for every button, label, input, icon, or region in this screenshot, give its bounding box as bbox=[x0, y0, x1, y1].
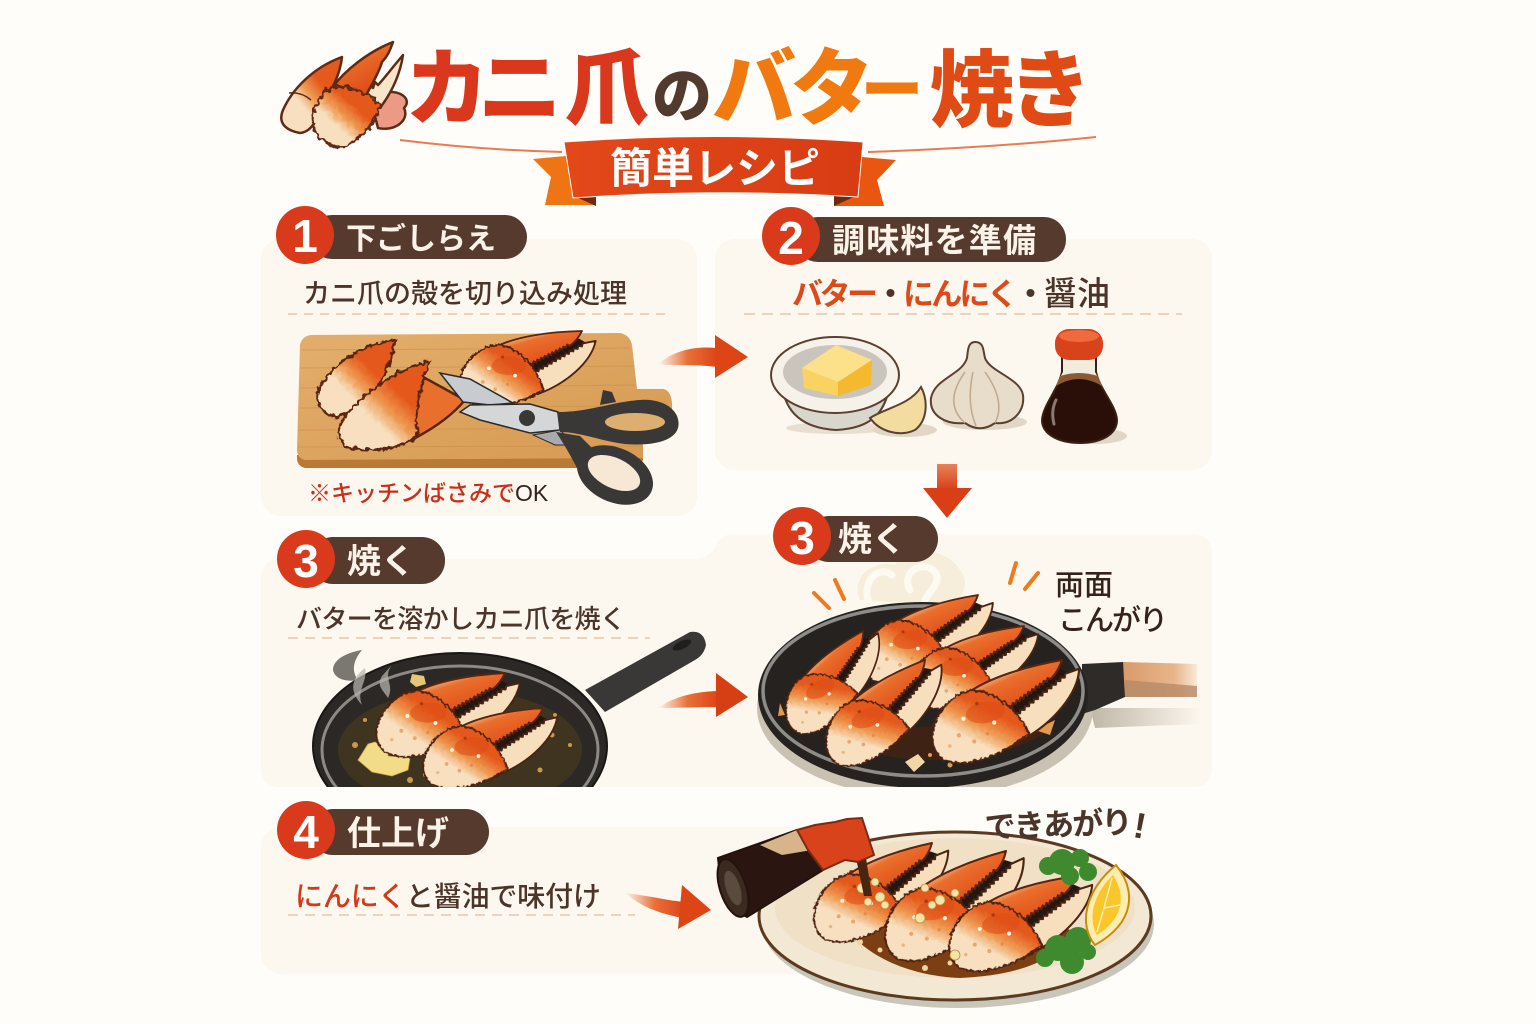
title text: カ bbox=[405, 42, 489, 136]
panel background bbox=[261, 827, 821, 974]
title text: 焼 bbox=[930, 44, 1014, 138]
ingredients text: ・ bbox=[875, 277, 906, 312]
title text: ー bbox=[861, 57, 923, 126]
step badge 4: 仕上げ bbox=[347, 815, 449, 853]
panel: step 3 both sides browned bbox=[757, 507, 1200, 798]
icon: soy sauce pouring bbox=[711, 818, 874, 921]
panel background bbox=[261, 239, 697, 516]
arrow: step 3 left to right bbox=[658, 673, 748, 717]
step badge 3: 焼く bbox=[838, 521, 906, 559]
panel: step 4 finishing bbox=[261, 801, 1154, 1008]
ingredients text: にんにく bbox=[903, 277, 1018, 312]
lemon bbox=[1086, 865, 1129, 945]
ingredients text: 醤油 bbox=[1044, 275, 1110, 312]
icon: garlic clove bbox=[870, 387, 937, 437]
icon: butter in dish bbox=[771, 337, 899, 434]
step badge 2: 調味料を準備 bbox=[832, 222, 1036, 259]
caption: finished: できあがり bbox=[984, 805, 1133, 845]
arrow: to finished plate bbox=[625, 885, 711, 929]
icon: kitchen scissors bbox=[440, 373, 679, 516]
exclamation mark: ! bbox=[1130, 804, 1149, 847]
icon: garlic bulb bbox=[931, 342, 1027, 430]
instruction text: カニ爪の殻を切り込み処理 bbox=[303, 279, 627, 309]
step badge 3 bbox=[773, 507, 938, 565]
title text bbox=[405, 42, 1092, 138]
note text bbox=[1055, 570, 1168, 637]
arrow: step 1 to step 2 bbox=[658, 335, 748, 378]
note text: 両面 bbox=[1055, 570, 1113, 602]
illustration: pan with browned claws bbox=[757, 593, 1200, 798]
illustration: finished plate bbox=[759, 832, 1154, 1008]
ingredients text bbox=[792, 275, 1110, 312]
step badge 4 bbox=[277, 801, 489, 859]
icon: steam bbox=[333, 650, 392, 705]
title text: ニ bbox=[478, 42, 562, 136]
step badge 2: 2 bbox=[778, 212, 804, 264]
note text: こんがり bbox=[1058, 604, 1168, 637]
step badge 2 bbox=[762, 207, 1066, 265]
title text: 爪 bbox=[565, 42, 649, 136]
garlic bits bbox=[857, 878, 960, 960]
title text: き bbox=[1008, 44, 1092, 138]
panel background: step 3 merged bbox=[261, 534, 1212, 787]
header: title and ribbon bbox=[281, 42, 1096, 206]
icon: crab claws bbox=[281, 42, 407, 148]
step badge 1: 1 bbox=[292, 210, 318, 262]
step badge 3: 焼く bbox=[347, 543, 415, 581]
parsley bbox=[1036, 849, 1097, 974]
instruction text: バターを溶かしカニ爪を焼く bbox=[296, 604, 626, 634]
panel background bbox=[715, 239, 1212, 470]
step badge 1 bbox=[276, 206, 527, 264]
step badge 4: 4 bbox=[293, 806, 319, 858]
icon: soy sauce bottle bbox=[1042, 329, 1127, 444]
steam cloud bbox=[858, 552, 965, 605]
title text: バ bbox=[712, 42, 796, 136]
title text: タ bbox=[790, 42, 874, 136]
note text: ※キッチンばさみでOK bbox=[308, 480, 549, 506]
step badge 3: 3 bbox=[789, 512, 815, 564]
step badge 3 bbox=[277, 530, 445, 588]
illustration: cutting board with claws bbox=[297, 331, 672, 468]
sizzle marks bbox=[814, 563, 1038, 608]
panel: step 3 melt butter and fry bbox=[277, 530, 706, 787]
arrow: step 2 down to step 3 bbox=[923, 464, 972, 518]
illustration: pan with butter and claws bbox=[312, 632, 706, 787]
title text: の bbox=[652, 63, 712, 130]
instruction text: にんにくと醤油で味付け bbox=[295, 881, 601, 912]
ribbon banner bbox=[400, 136, 1096, 206]
step badge 3: 3 bbox=[293, 535, 319, 587]
panel: step 1 preparation bbox=[261, 206, 697, 516]
ribbon text: 簡単レシピ bbox=[610, 145, 820, 192]
ingredients text: ・ bbox=[1015, 277, 1046, 312]
step badge 1: 下ごしらえ bbox=[346, 222, 496, 256]
ingredients text: バター bbox=[792, 277, 878, 312]
panel: step 2 seasonings bbox=[715, 207, 1212, 470]
